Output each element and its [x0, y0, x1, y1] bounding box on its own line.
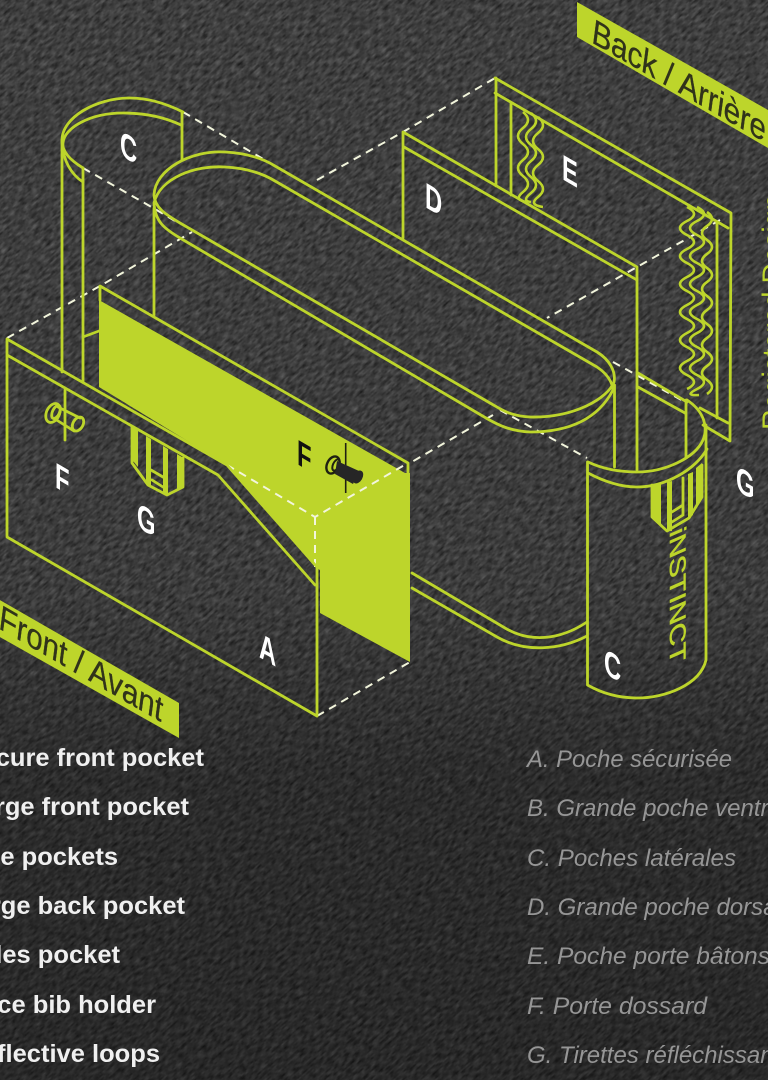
french legend: F. Porte dossard [527, 993, 708, 1020]
icon: bib holder clip right [324, 443, 365, 493]
elastic waves left [518, 112, 543, 207]
label: letter D: D [425, 174, 442, 225]
panel: side pocket C right cylinder [588, 400, 707, 698]
reflective loop G on right cylinder [652, 463, 702, 531]
label: letter F left: F [55, 454, 70, 503]
brand logo on pocket: iNSTINCT [665, 524, 689, 668]
label: letter A: A [259, 624, 276, 675]
elastic waves right [680, 207, 712, 395]
label: letter G front: G [137, 494, 155, 546]
label: letter G right: G [736, 457, 754, 509]
french legend: C. Poches latérales [527, 845, 736, 872]
banner: back: Back / Arrière [590, 12, 768, 150]
french legend [525, 746, 768, 1069]
label: letter C top: C [120, 122, 137, 173]
label: letter F black: F [297, 431, 312, 480]
panel: side pocket C left cylinder [62, 98, 183, 382]
panel: main belt [154, 152, 614, 648]
label: letter E: E [562, 146, 578, 196]
label: letter C right: C [604, 640, 621, 691]
panel: highlighted large front pocket [99, 300, 410, 662]
banner: front: Front / Avant [0, 598, 166, 730]
french legend: A. Poche sécurisée [525, 746, 732, 773]
french legend: E. Poche porte bâtons [527, 943, 768, 970]
reflective loop G on front [132, 427, 183, 495]
panel: large back pocket D [403, 132, 687, 470]
upper edge of large front pocket B [100, 286, 408, 473]
english legend [0, 744, 205, 1068]
panel: secure front pocket A [7, 339, 317, 716]
panel: poles pocket E [495, 78, 731, 441]
dashed construction lines [7, 78, 720, 716]
icon: bib holder clip left [43, 390, 86, 440]
